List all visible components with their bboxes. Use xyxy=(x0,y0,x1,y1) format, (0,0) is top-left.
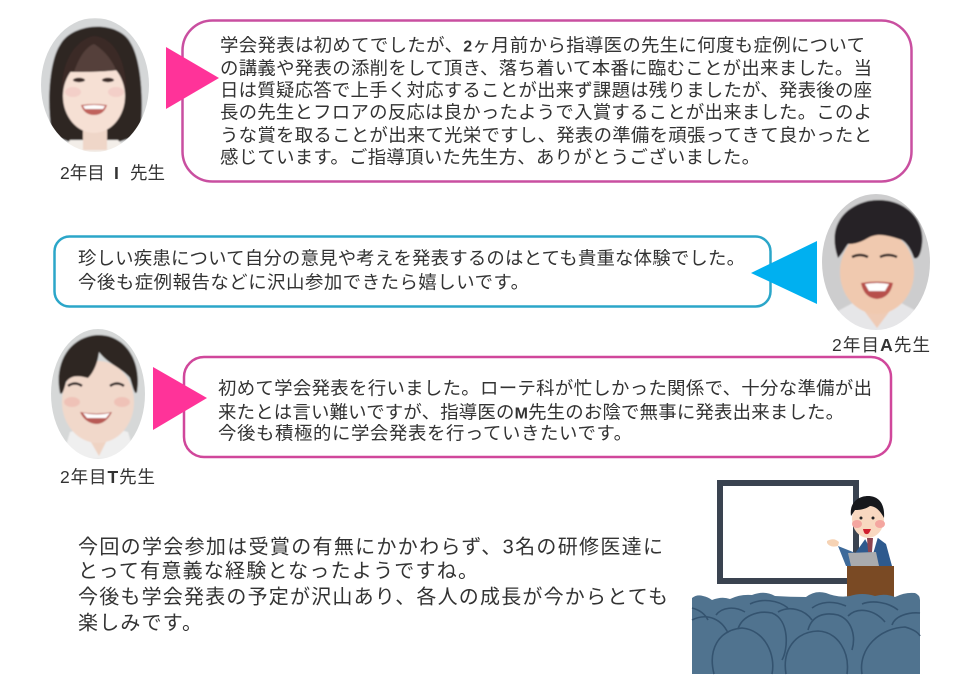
bubble text xyxy=(218,378,872,444)
bubble text: 今後も症例報告などに沢山参加できたら嬉しいです。 xyxy=(78,272,529,292)
closing message: 楽しみです。 xyxy=(78,612,202,634)
label: first resident: 2年目 xyxy=(60,163,105,183)
speech bubble: third resident xyxy=(153,357,891,457)
bubble text xyxy=(220,34,872,168)
bubble text: 今後も積極的に学会発表を行っていきたいです。 xyxy=(218,422,632,444)
podium xyxy=(847,566,894,597)
audience xyxy=(692,592,920,674)
speech bubble: first resident xyxy=(166,20,912,182)
presentation screen xyxy=(720,483,856,581)
bubble text: 長の先生とフロアの反応は良かったようで入賞することが出来ました。このよ xyxy=(220,102,872,122)
label: first resident: 先生 xyxy=(130,163,165,183)
bubble text: 来たとは言い難いですが、指導医のM先生のお陰で無事に発表出来ました。 xyxy=(218,402,844,422)
bubble text: 初めて学会発表を行いました。ローテ科が忙しかった関係で、十分な準備が出 xyxy=(218,378,872,398)
closing message: とって有意義な経験となったようですね。 xyxy=(78,560,478,582)
pointer triangle xyxy=(751,241,817,304)
speech bubble: second resident xyxy=(54,236,817,306)
bubble text: うな賞を取ることが出来て光栄ですし、発表の準備を頑張ってきて良かったと xyxy=(220,124,872,146)
bubble text xyxy=(78,248,745,292)
pointer triangle xyxy=(153,367,207,430)
label: third resident: 2年目T先生 xyxy=(60,467,155,487)
illustration: presenter and audience xyxy=(692,483,920,674)
bubble text: の講義や発表の添削をして頂き、落ち着いて本番に臨むことが出来ました。当 xyxy=(220,58,872,78)
laptop xyxy=(848,552,879,566)
closing message xyxy=(78,536,668,634)
closing message: 今後も学会発表の予定が沢山あり、各人の成長が今からとても xyxy=(78,586,668,608)
bubble outline xyxy=(182,20,912,182)
label: first resident: I xyxy=(114,163,119,183)
portrait: third resident xyxy=(50,328,148,460)
bubble text: 日は質疑応答で上手く対応することが出来ず課題は残りましたが、発表後の座 xyxy=(220,80,872,100)
bubble text: 珍しい疾患について自分の意見や考えを発表するのはとても貴重な体験でした。 xyxy=(78,248,745,268)
portrait: second resident xyxy=(820,192,932,335)
pointer triangle xyxy=(166,47,219,109)
bubble outline xyxy=(54,236,770,306)
bubble text: 感じています。ご指導頂いた先生方、ありがとうございました。 xyxy=(220,146,760,168)
presenter xyxy=(827,496,892,566)
bubble outline xyxy=(184,357,891,457)
label: second resident: 2年目A先生 xyxy=(832,335,930,355)
bubble text: 学会発表は初めてでしたが、2ヶ月前から指導医の先生に何度も症例について xyxy=(220,34,865,56)
portrait: first resident xyxy=(40,18,152,154)
closing message: 今回の学会参加は受賞の有無にかかわらず、3名の研修医達に xyxy=(78,536,663,558)
